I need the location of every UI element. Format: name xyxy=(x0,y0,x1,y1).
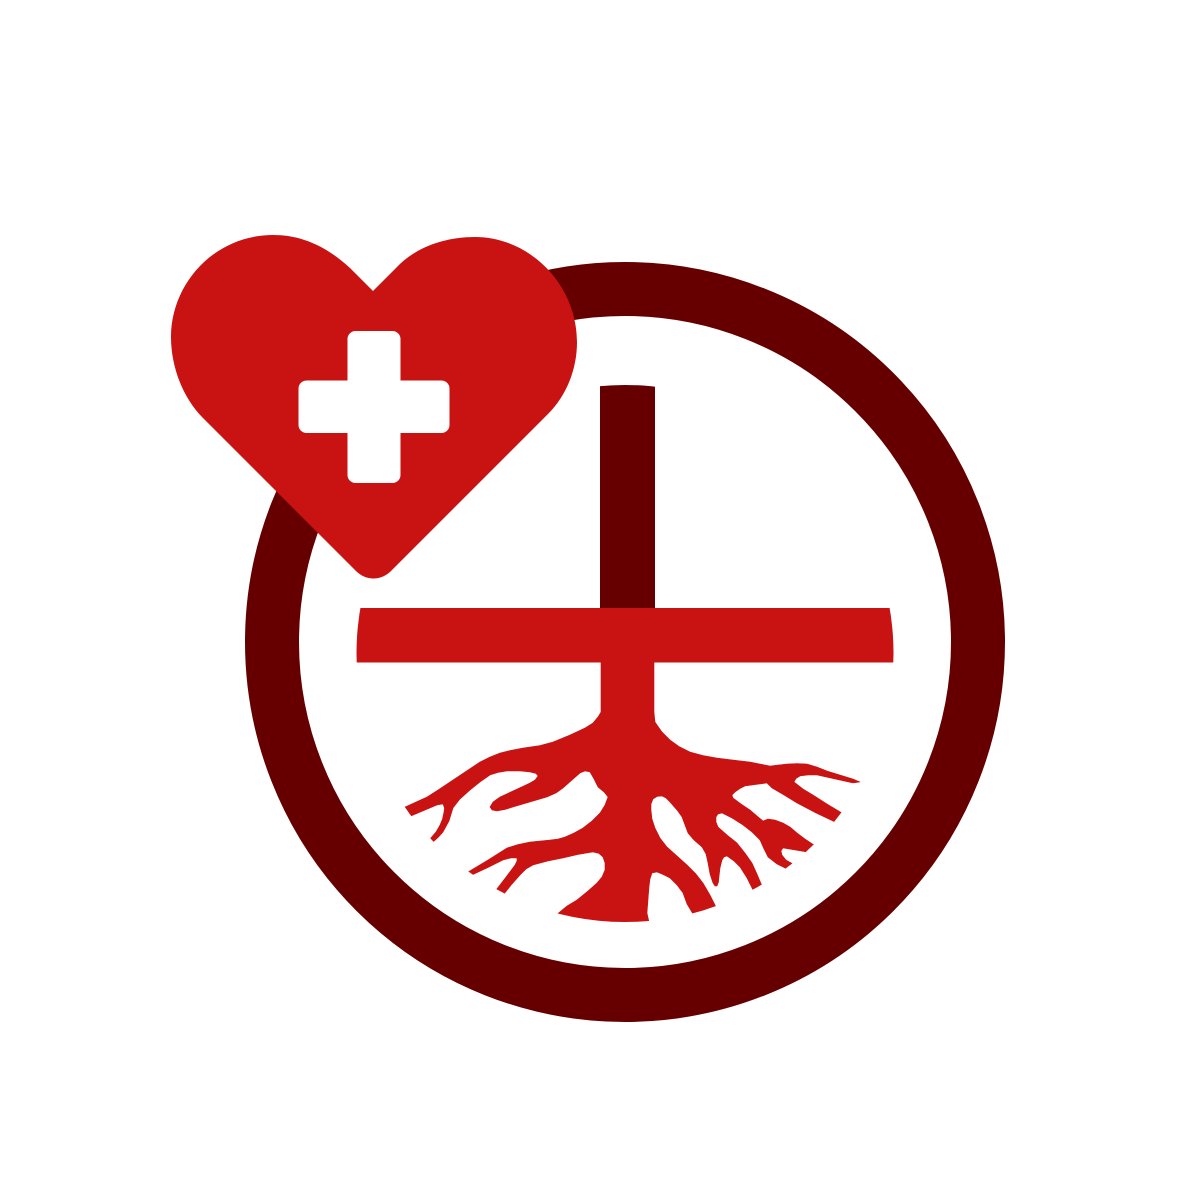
icon: medical cross xyxy=(298,331,450,483)
icon: heart xyxy=(171,235,577,578)
ring xyxy=(272,289,978,995)
roots xyxy=(405,660,860,930)
stem xyxy=(600,370,655,609)
ground bar xyxy=(340,608,910,662)
emblem xyxy=(171,235,1005,1022)
plant symbol xyxy=(340,370,910,930)
